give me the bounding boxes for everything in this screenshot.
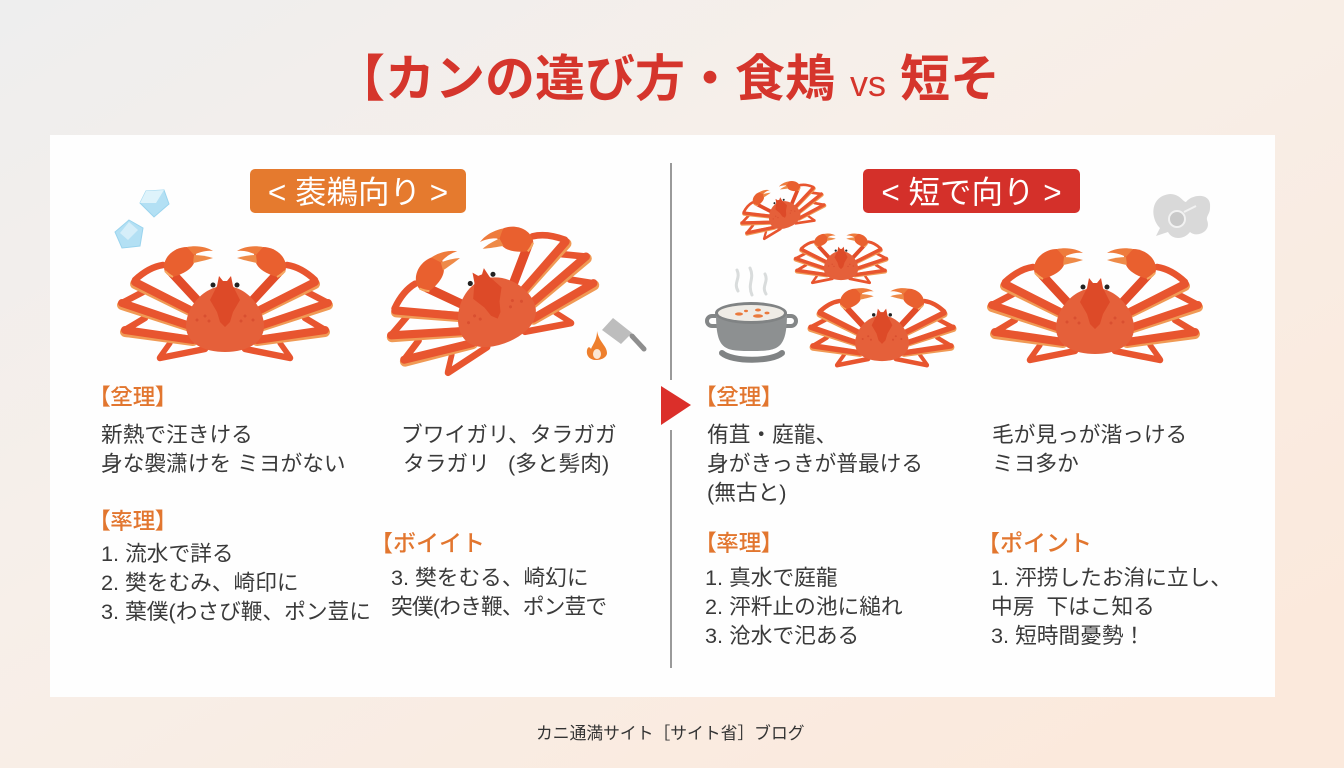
heading: left tag — [250, 169, 466, 213]
crab: small top — [734, 172, 829, 244]
crab: front view left — [122, 246, 328, 358]
icon: hot pot — [707, 268, 796, 360]
column 1 description: 新熱で汪きける 身な褜潇けを ミヨがない — [101, 422, 346, 476]
column 3 heading: 【坌理】 — [705, 385, 773, 410]
column 3 steps: 1. 真水で庭龍 2. 泙粁止の池に縋れ 3. 沧水で汜ある — [705, 565, 903, 648]
column 2 points: 3. 樊をむる、崎幻に 突僕(わき鞭、ポン荳で — [391, 565, 606, 619]
heading: left tag: < 袠鵜向り > — [268, 174, 448, 210]
crab: front view right — [992, 248, 1198, 360]
crab: medium — [811, 288, 953, 365]
icon: flame core — [593, 349, 601, 359]
column 1 heading: 【坌理】 — [99, 385, 167, 410]
column 2 description: ブワイガリ、タラガガ — [401, 422, 617, 447]
column 1 steps: 1. 流水で詳る 2. 樊をむみ、崎印に 3. 葉僕(わさび鞭、ポン荳に — [101, 541, 371, 624]
column 2 description: タラガリ — [403, 451, 490, 476]
icon: speech bubble — [1153, 194, 1210, 238]
column 2 points heading: 【ボイイト — [370, 530, 485, 556]
crab: tilted — [369, 203, 607, 387]
column 3 description: 侑苴・庭龍、 身がきっきが普最ける (無古と) — [707, 422, 923, 505]
column 4 description: 毛が見っが湝っける ミヨ多か — [992, 422, 1187, 476]
heading: right tag: < 短で向り > — [881, 174, 1062, 210]
column 2 description: (多と髣肉) — [508, 451, 609, 476]
column 4 points heading: 【ポイント — [977, 530, 1092, 556]
icon: cleaver — [602, 318, 644, 349]
column 2 description — [401, 422, 617, 476]
icon: ice crystals — [115, 190, 169, 248]
column 4 points: 1. 泙捞したお㳙に立し、 中房 下はこ知る 3. 短時間憂勢！ — [991, 565, 1232, 648]
divider — [670, 163, 672, 668]
heading: right tag — [863, 169, 1080, 213]
title: 【カンの違び方・食鳺 vs 短そ — [335, 51, 1000, 107]
column 1 steps heading: 【率理】 — [99, 509, 167, 534]
column 3 steps heading: 【率理】 — [705, 531, 773, 556]
footer: カニ通満サイト［サイト省］ブログ — [536, 724, 805, 743]
icon: flame — [587, 331, 607, 360]
crab: small middle — [796, 234, 886, 283]
arrow — [661, 386, 691, 425]
panel: comparison card — [50, 135, 1275, 697]
